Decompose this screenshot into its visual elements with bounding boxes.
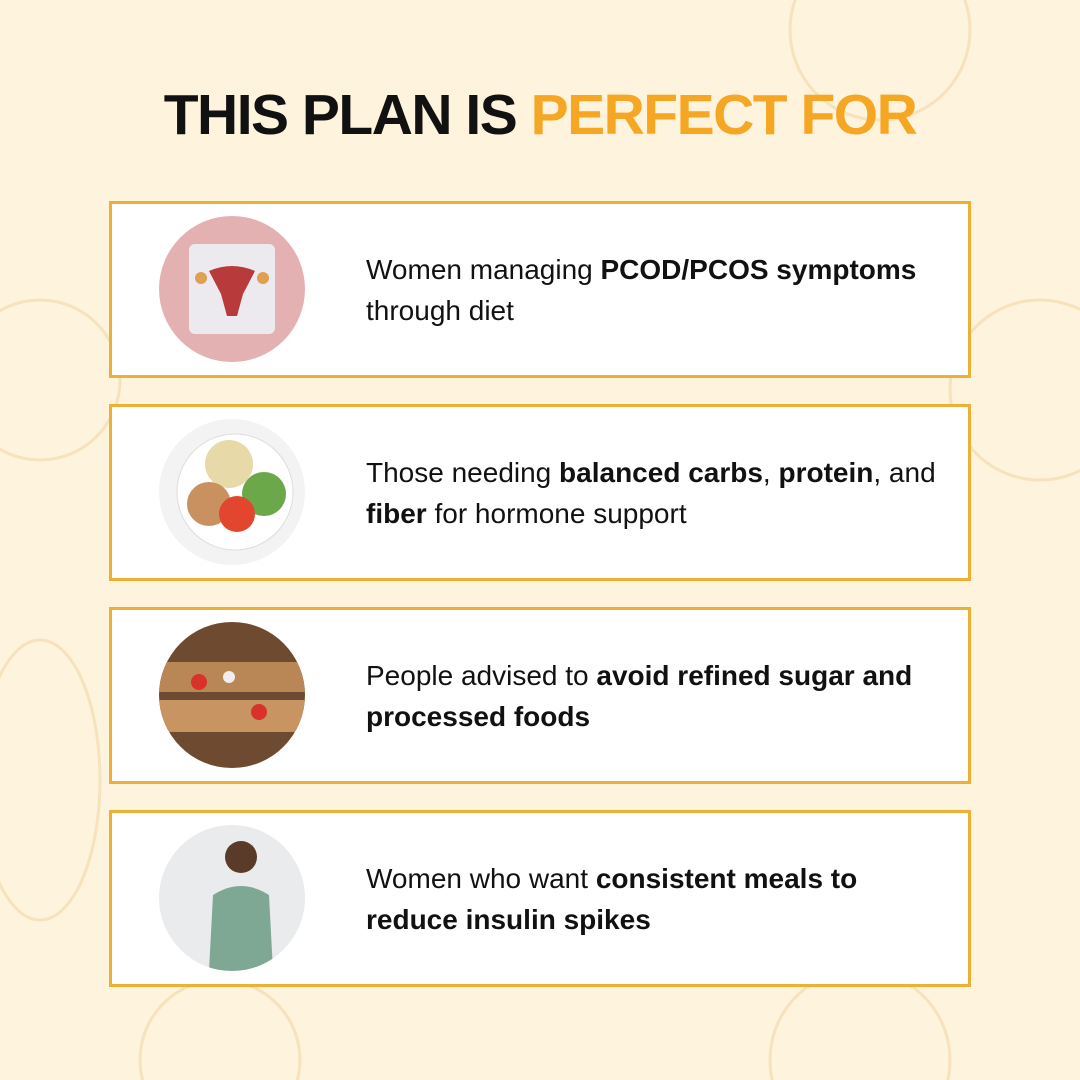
icon: uterus cube [159,216,305,362]
text: People advised to avoid refined sugar and processed foods [366,660,912,732]
text: Women who want consistent meals to reduce insulin spikes [366,862,857,934]
card 3 [109,607,971,784]
icon: woman [159,825,305,971]
text: Women managing PCOD/PCOS symptoms through diet [366,254,916,326]
icon: meal boxes [159,622,305,768]
card 4 [109,810,971,987]
card 2 [109,404,971,581]
text: Those needing balanced carbs, protein, and fiber for hormone support [366,456,936,528]
card 1 [109,201,971,378]
title: THIS PLAN IS PERFECT FOR [164,83,916,147]
icon: balanced bowl [159,419,305,565]
